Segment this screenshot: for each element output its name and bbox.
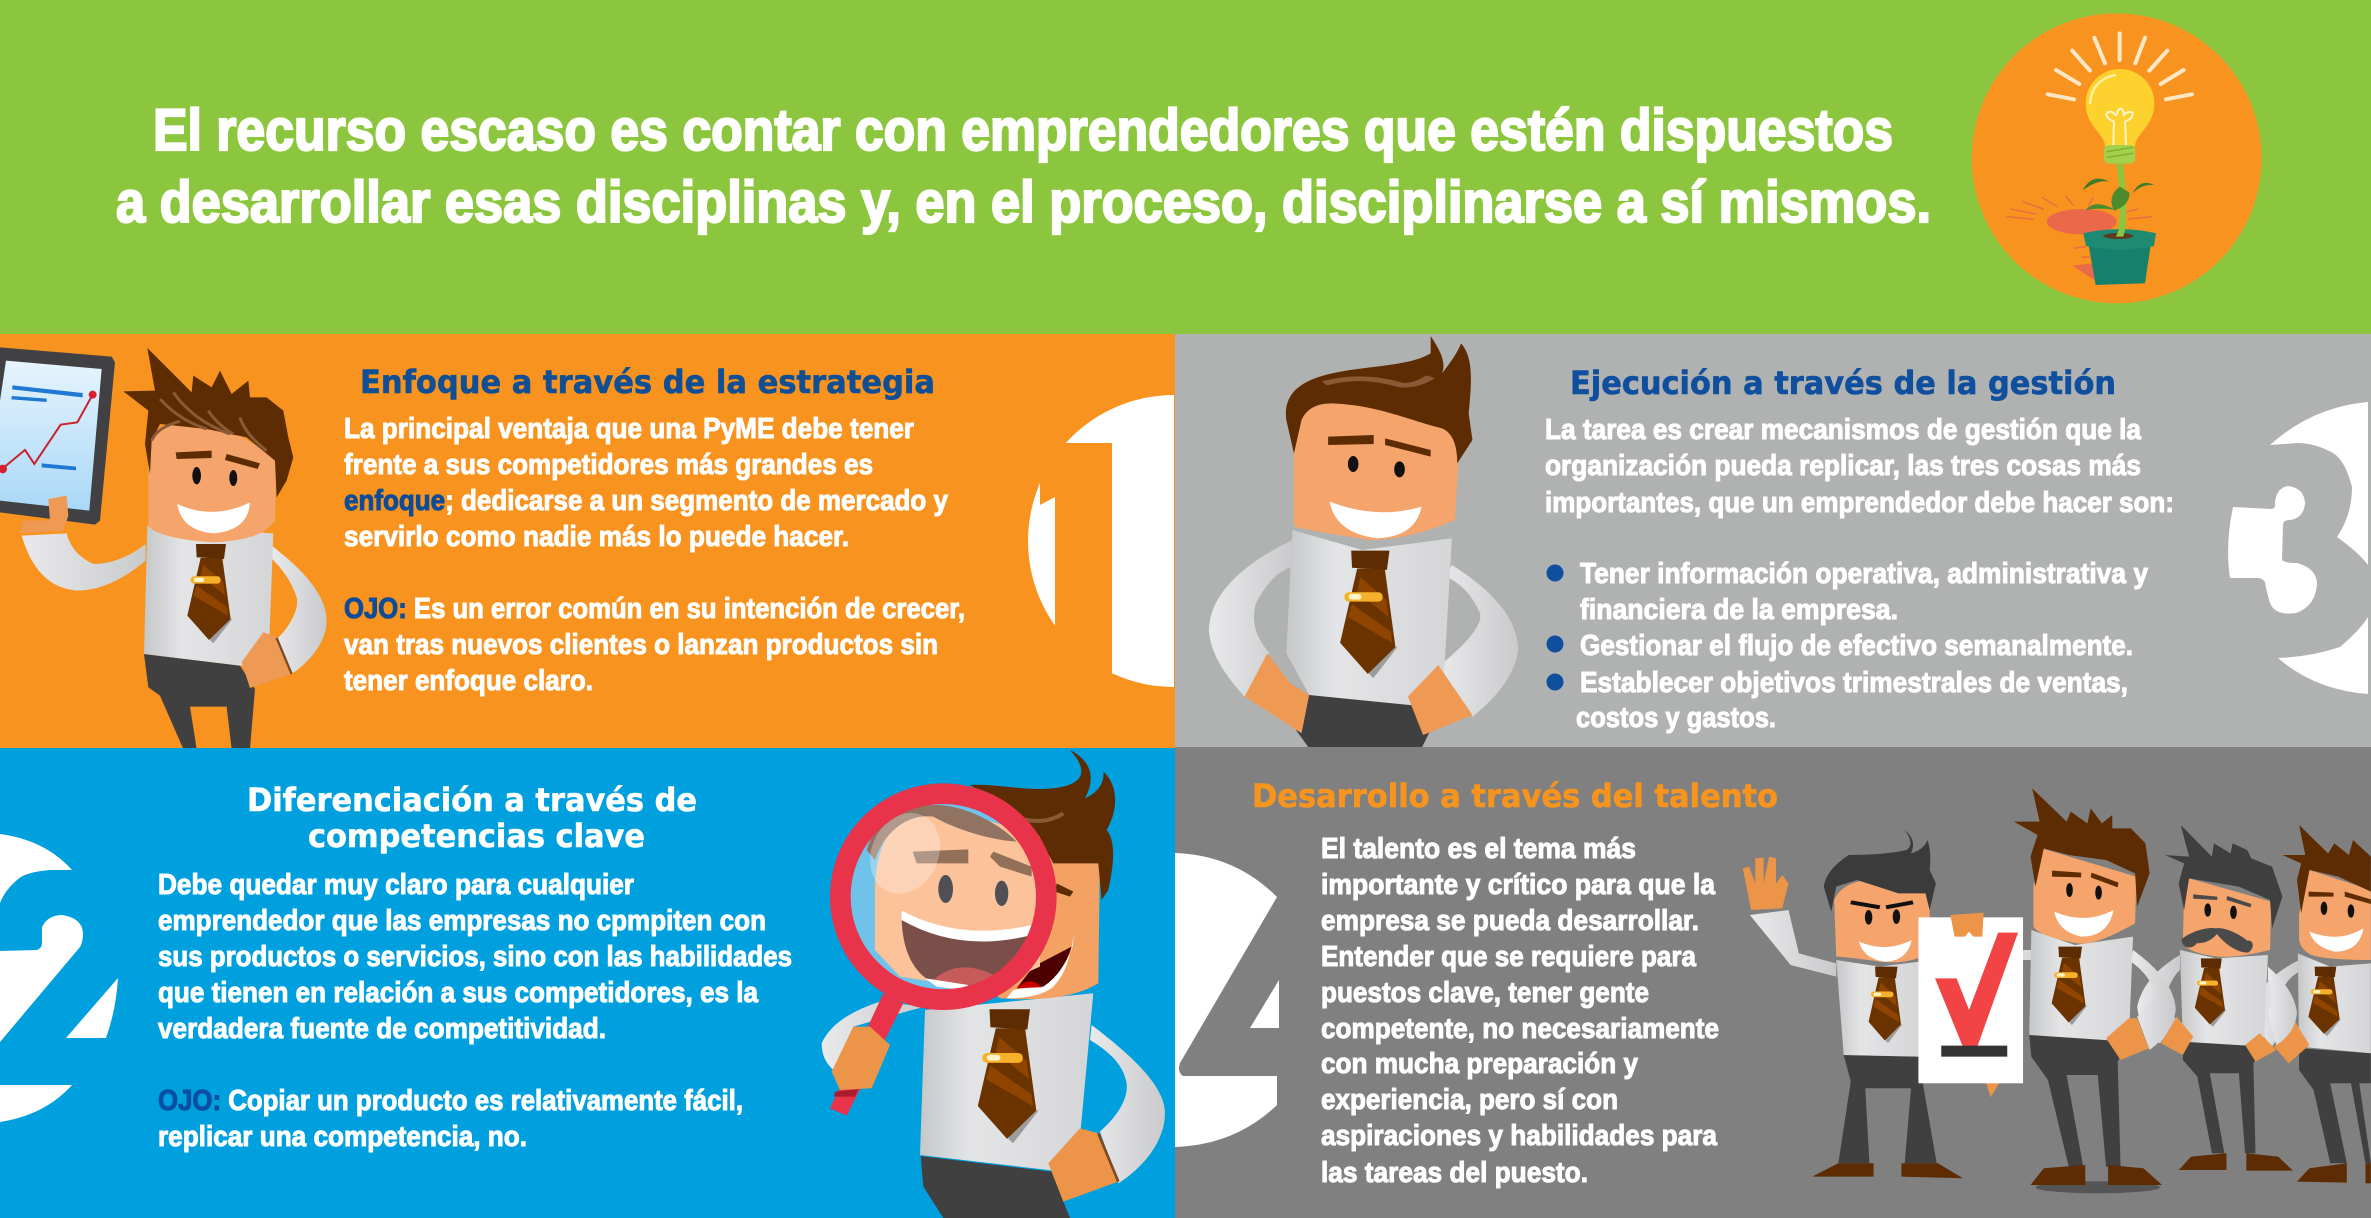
text block: gestión: organización pueda replicar, las tres cosas más — [1545, 450, 2141, 482]
text block: talento: aspiraciones y habilidades para — [1321, 1120, 1718, 1152]
text block: enfoque: tener enfoque claro. — [344, 665, 593, 697]
bullet list: Establecer objetivos trimestrales de ventas, — [1580, 667, 2128, 699]
bullet list: costos y gastos. — [1576, 702, 1776, 734]
text block: gestión — [1545, 414, 2174, 519]
text block: gestión: importantes, que un emprendedor debe hacer son: — [1545, 487, 2174, 519]
heading: Enfoque a través de la estrategia — [360, 363, 935, 401]
number 2 — [0, 834, 118, 1122]
text block: talento: competente, no necesariamente — [1321, 1013, 1719, 1045]
text block: talento: Entender que se requiere para — [1321, 941, 1697, 973]
illustration: smiling man — [1209, 336, 1518, 748]
text block: enfoque: enfoque; dedicarse a un segmento de mercado y — [344, 485, 948, 517]
heading: Ejecución a través de la gestión — [1570, 364, 2116, 402]
character: man C with moustache — [2137, 825, 2297, 1171]
panel: 1 enfoque (orange) — [0, 334, 1175, 749]
title: a desarrollar esas disciplinas y, en el proceso, disciplinarse a sí mismos. — [116, 170, 1931, 235]
text block: competencias: emprendedor que las empresas no cpmpiten con — [158, 905, 766, 937]
text block: competencias: verdadera fuente de competitividad. — [158, 1013, 606, 1045]
panel: 2 diferenciación (blue) — [0, 748, 1175, 1218]
panel: 3 ejecución (light gray) — [1175, 334, 2371, 748]
text block: enfoque: OJO: Es un error común en su intención de crecer, — [344, 593, 965, 625]
text block: talento: con mucha preparación y — [1321, 1048, 1638, 1080]
illustration: man with magnifying glass — [822, 750, 1165, 1218]
character: man D right — [2253, 825, 2371, 1183]
text block: enfoque: servirlo como nadie más lo puede hacer. — [344, 521, 849, 553]
heading: Desarrollo a través del talento — [1252, 777, 1778, 815]
text block: talento: experiencia, pero sí con — [1321, 1084, 1618, 1116]
number 4 — [1175, 853, 1279, 1147]
heading: competencias clave — [308, 817, 645, 855]
text block: competencias: replicar una competencia, no. — [158, 1121, 527, 1153]
text block: talento: importante y crítico para que la — [1321, 869, 1716, 901]
panel: green banner — [0, 0, 2371, 334]
text block: gestión: La tarea es crear mecanismos de gestión que la — [1545, 414, 2142, 446]
illustration: team of four men — [1743, 788, 2371, 1193]
bullet list: Tener información operativa, administrativa y — [1580, 558, 2148, 590]
character: man B — [2014, 788, 2176, 1185]
text block: enfoque: van tras nuevos clientes o lanzan productos sin — [344, 629, 938, 661]
text block: talento: puestos clave, tener gente — [1321, 977, 1649, 1009]
text block: competencias: Debe quedar muy claro para cualquier — [158, 869, 634, 901]
panel: 4 desarrollo (dark gray) — [1175, 747, 2371, 1218]
text block: enfoque: frente a sus competidores más grandes es — [344, 449, 873, 481]
text block: talento: El talento es el tema más — [1321, 833, 1636, 865]
text block: competencias — [158, 869, 792, 1153]
text block: competencias: que tienen en relación a sus competidores, es la — [158, 977, 759, 1009]
text block: talento: empresa se pueda desarrollar. — [1321, 905, 1699, 937]
text block: talento: las tareas del puesto. — [1321, 1157, 1588, 1189]
heading — [247, 781, 697, 855]
text block: enfoque — [344, 413, 965, 697]
title: El recurso escaso es contar con emprendedores que estén dispuestos — [153, 98, 1893, 163]
number 1 — [1028, 395, 1174, 700]
text block: talento — [1321, 833, 1719, 1189]
number 3 — [2228, 402, 2368, 694]
bullet list: Gestionar el flujo de efectivo semanalmente. — [1580, 630, 2133, 662]
icon: light bulb plant in orange circle — [1972, 13, 2262, 303]
character: man A waving — [1743, 830, 1963, 1178]
bullet list — [1546, 558, 2148, 734]
title — [116, 98, 1931, 235]
text block: competencias: OJO: Copiar un producto es relativamente fácil, — [158, 1085, 743, 1117]
heading: Diferenciación a través de — [247, 781, 697, 819]
text block: competencias: sus productos o servicios, sino con las habilidades — [158, 941, 792, 973]
bullet list: financiera de la empresa. — [1580, 594, 1898, 626]
sign with red check mark — [1918, 913, 2023, 1097]
illustration: man with tablet — [0, 347, 327, 749]
text block: enfoque: La principal ventaja que una PyME debe tener — [344, 413, 914, 445]
